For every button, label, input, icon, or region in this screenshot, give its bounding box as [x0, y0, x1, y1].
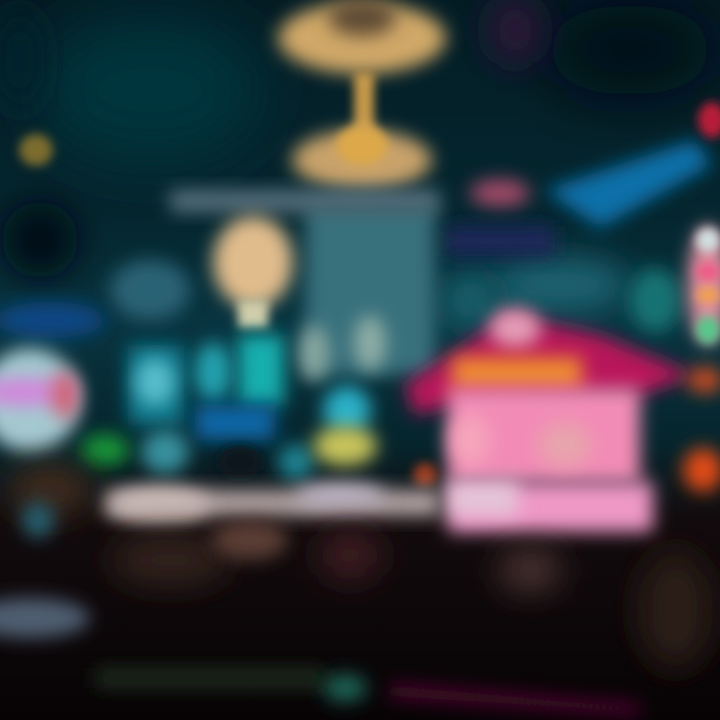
pink booth [405, 308, 695, 532]
chandelier [278, 0, 446, 190]
left blue band [0, 302, 105, 338]
yellow blue figure [313, 386, 377, 466]
twin lights [299, 315, 386, 381]
floor lights [95, 668, 640, 716]
white table band [105, 483, 440, 523]
left striped balloon [0, 348, 80, 452]
screen panel [110, 190, 440, 375]
right orange lights [413, 367, 720, 492]
teal figures [128, 342, 314, 480]
blue banner [445, 102, 720, 256]
green glow [81, 434, 129, 466]
lightbulb figure [213, 216, 293, 405]
small gold light [19, 134, 53, 166]
right rainbow balloon [688, 225, 720, 345]
crowd [0, 464, 713, 670]
